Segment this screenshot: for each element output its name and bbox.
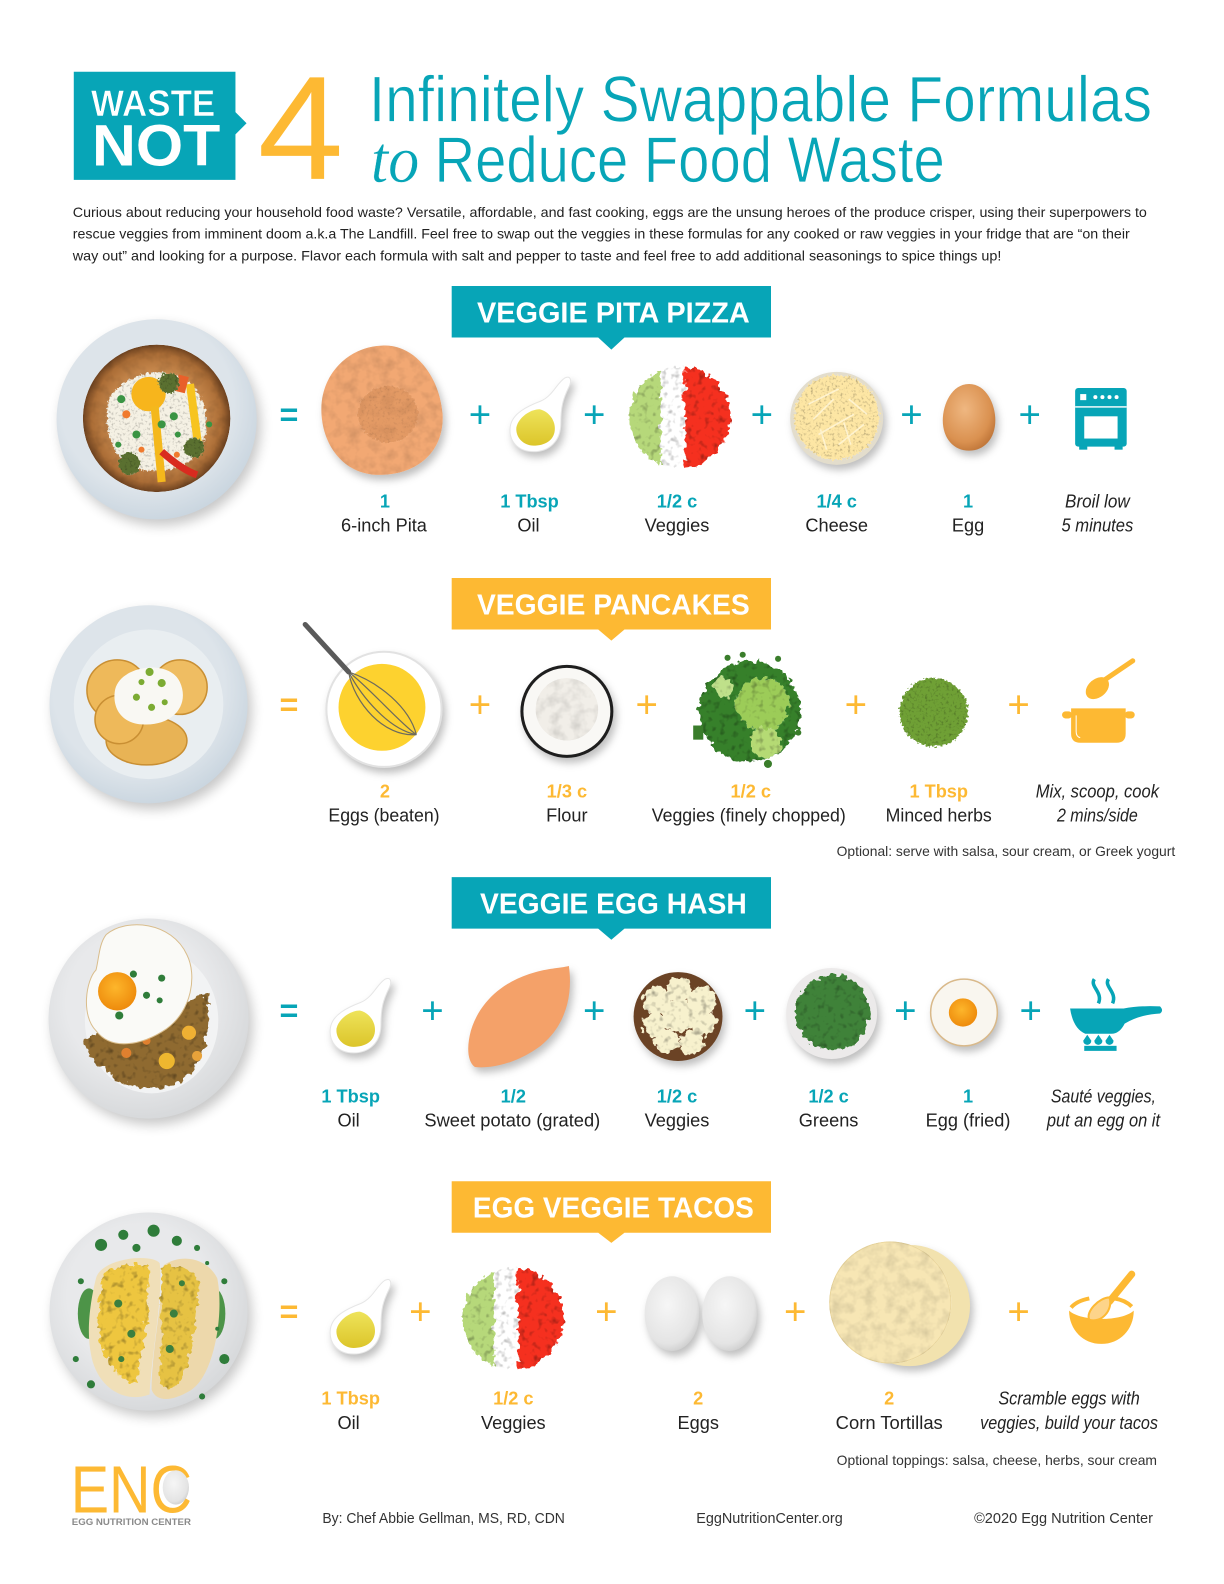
intro paragraph: Curious about reducing your household food waste? Versatile, affordable, and fast cooking, eggs are the unsung heroes of the produce crisper, using their superpowers to	[73, 205, 1147, 220]
title: Reduce Food Waste	[435, 123, 945, 196]
plus: +	[409, 1291, 432, 1334]
ingredient: cauliflower: 1/2 c	[657, 1086, 697, 1106]
plus: +	[469, 393, 491, 436]
plus: +	[744, 990, 766, 1033]
panel: Veggie Pita Pizza	[57, 286, 1133, 536]
title: to	[371, 124, 419, 197]
ingredient: oil	[321, 978, 391, 1131]
ingredient: eggs	[645, 1276, 757, 1433]
intro paragraph	[72, 205, 1147, 264]
ingredient: minced herbs: 1 Tbsp	[909, 781, 968, 801]
ingredient: oil: Oil	[338, 1111, 360, 1131]
title	[369, 62, 1152, 197]
ingredient: oil: 1 Tbsp	[500, 491, 559, 511]
ingredient: cauliflower	[634, 972, 722, 1131]
ingredient: greens: Greens	[799, 1111, 858, 1131]
plus: +	[1018, 393, 1041, 436]
header	[74, 46, 1152, 211]
ingredient: cauliflower: Veggies	[645, 1111, 709, 1131]
panel: Veggie Egg Hash	[49, 877, 1162, 1131]
icon: bowl and whisk	[1069, 1274, 1134, 1344]
footer credits	[322, 1511, 1153, 1527]
heading	[452, 286, 771, 350]
intro paragraph: rescue veggies from imminent doom a.k.a The Landfill. Feel free to swap out the veggies in these formulas for any cooked or raw veggies in your fridge that are “on their	[73, 226, 1130, 241]
logo: Egg Nutrition Center: EGG NUTRITION CENTER	[72, 1517, 191, 1528]
ingredient: chopped veggies: 1/2 c	[731, 781, 771, 801]
ingredient: oil: Oil	[338, 1413, 360, 1433]
plus: +	[421, 990, 444, 1033]
heading: VEGGIE PITA PIZZA	[477, 296, 750, 328]
ingredient: flour: Flour	[546, 806, 588, 826]
ingredient: beaten eggs	[305, 624, 442, 826]
plus: +	[1007, 1291, 1030, 1334]
ingredient: flour: 1/3 c	[547, 781, 587, 801]
plate: pancakes	[50, 605, 252, 809]
optional note: Optional: serve with salsa, sour cream, or Greek yogurt	[837, 843, 1175, 859]
badge: Waste Not: WASTE	[91, 82, 215, 124]
badge: Waste Not	[74, 72, 247, 180]
plus: +	[635, 683, 658, 726]
heading	[452, 578, 771, 641]
plus: +	[469, 683, 491, 726]
step: broil	[1062, 388, 1133, 536]
plus: +	[900, 393, 923, 436]
plus: +	[784, 1291, 806, 1334]
plus: +	[1007, 683, 1030, 726]
ingredient: corn tortillas	[830, 1242, 970, 1433]
badge: Waste Not: NOT	[92, 114, 221, 179]
plus: +	[583, 393, 605, 436]
equals: =	[280, 993, 298, 1029]
ingredient: flour	[520, 665, 613, 826]
plus: +	[894, 990, 917, 1033]
step: scramble	[980, 1274, 1158, 1433]
ingredient: oil: Oil	[517, 516, 540, 536]
ingredient: pita: 1	[380, 491, 390, 511]
ingredient: egg: 1	[963, 491, 973, 511]
ingredient: veggies: Veggies	[481, 1413, 546, 1433]
plus: +	[751, 393, 773, 436]
ingredient: cheese: 1/4 c	[816, 491, 857, 511]
step: broil: 5 minutes	[1062, 516, 1133, 536]
ingredient: veggies: 1/2 c	[657, 491, 697, 511]
icon: pot and spoon	[1062, 661, 1135, 743]
ingredient: greens	[786, 968, 877, 1131]
ingredient: fried egg: 1	[963, 1086, 973, 1106]
ingredient: eggs: Eggs	[678, 1413, 719, 1433]
ingredient: veggies	[463, 1268, 565, 1433]
ingredient: corn tortillas: Corn Tortillas	[836, 1413, 943, 1433]
big number 4: 4	[258, 46, 344, 211]
ingredient: egg	[943, 384, 995, 536]
footer credits: EggNutritionCenter.org	[696, 1511, 843, 1527]
optional note: Optional toppings: salsa, cheese, herbs, sour cream	[837, 1452, 1157, 1468]
title: Infinitely Swappable Formulas	[369, 62, 1152, 135]
step: cook	[1036, 661, 1160, 826]
ingredient: minced herbs	[886, 678, 992, 826]
panel: Veggie Pancakes	[50, 578, 1175, 859]
step: saute: put an egg on it	[1046, 1111, 1161, 1131]
ingredient: greens: 1/2 c	[808, 1086, 849, 1106]
equals: =	[280, 1294, 298, 1330]
equals: =	[280, 396, 298, 432]
intro paragraph: way out” and looking for a purpose. Flavor each formula with salt and pepper to taste and feel free to add additional seasonings to spice things up!	[72, 249, 1001, 264]
ingredient: oil	[500, 377, 571, 536]
ingredient: oil: 1 Tbsp	[321, 1086, 380, 1106]
ingredient: egg: Egg	[952, 516, 984, 536]
plus: +	[1019, 990, 1042, 1033]
ingredient: cheese	[790, 372, 883, 536]
footer credits: ©2020 Egg Nutrition Center	[974, 1511, 1153, 1527]
heading	[452, 1181, 771, 1243]
ingredient: sweet potato	[424, 966, 600, 1131]
plate: pita pizza	[57, 319, 261, 525]
ingredient: cheese: Cheese	[805, 516, 868, 536]
ingredient: veggies: Veggies	[645, 516, 709, 536]
heading: VEGGIE PANCAKES	[477, 588, 750, 620]
step: scramble: Scramble eggs with	[998, 1389, 1140, 1409]
plus: +	[583, 990, 605, 1033]
icon: frying pan	[1070, 979, 1162, 1051]
ingredient: sweet potato: Sweet potato (grated)	[424, 1111, 600, 1131]
ingredient: eggs: 2	[693, 1389, 703, 1409]
ingredient: fried egg: Egg (fried)	[926, 1111, 1010, 1131]
ingredient: beaten eggs: 2	[380, 781, 390, 801]
heading: VEGGIE EGG HASH	[480, 887, 747, 919]
heading	[452, 877, 771, 940]
step: saute: Sauté veggies,	[1051, 1086, 1156, 1106]
ingredient: minced herbs: Minced herbs	[886, 806, 992, 826]
equals: =	[280, 686, 298, 722]
icon: oven	[1075, 388, 1127, 450]
ingredient: fried egg	[926, 979, 1010, 1131]
step: saute	[1046, 979, 1162, 1131]
ingredient: corn tortillas: 2	[884, 1389, 894, 1409]
heading: EGG VEGGIE TACOS	[473, 1192, 754, 1224]
ingredient: sweet potato: 1/2	[501, 1086, 526, 1106]
ingredient: oil: 1 Tbsp	[321, 1389, 380, 1409]
ingredient: pita	[321, 345, 443, 536]
ingredient: veggies	[630, 367, 732, 536]
ingredient: veggies: 1/2 c	[493, 1389, 534, 1409]
ingredient: beaten eggs: Eggs (beaten)	[328, 806, 440, 826]
ingredient: oil	[321, 1279, 391, 1433]
ingredient: chopped veggies	[652, 652, 846, 826]
step: scramble: veggies, build your tacos	[980, 1413, 1158, 1433]
plate: egg hash	[49, 919, 253, 1125]
step: cook: 2 mins/side	[1056, 806, 1138, 826]
step: broil: Broil low	[1065, 491, 1131, 511]
step: cook: Mix, scoop, cook	[1036, 781, 1160, 801]
plus: +	[595, 1291, 618, 1334]
logo: Egg Nutrition Center: ENC	[71, 1454, 192, 1528]
footer credits: By: Chef Abbie Gellman, MS, RD, CDN	[322, 1511, 565, 1527]
panel: Egg Veggie Tacos	[50, 1181, 1158, 1468]
plate: tacos	[50, 1213, 252, 1417]
plus: +	[845, 683, 867, 726]
ingredient: pita: 6-inch Pita	[341, 516, 428, 536]
ingredient: chopped veggies: Veggies (finely chopped)	[652, 806, 846, 826]
